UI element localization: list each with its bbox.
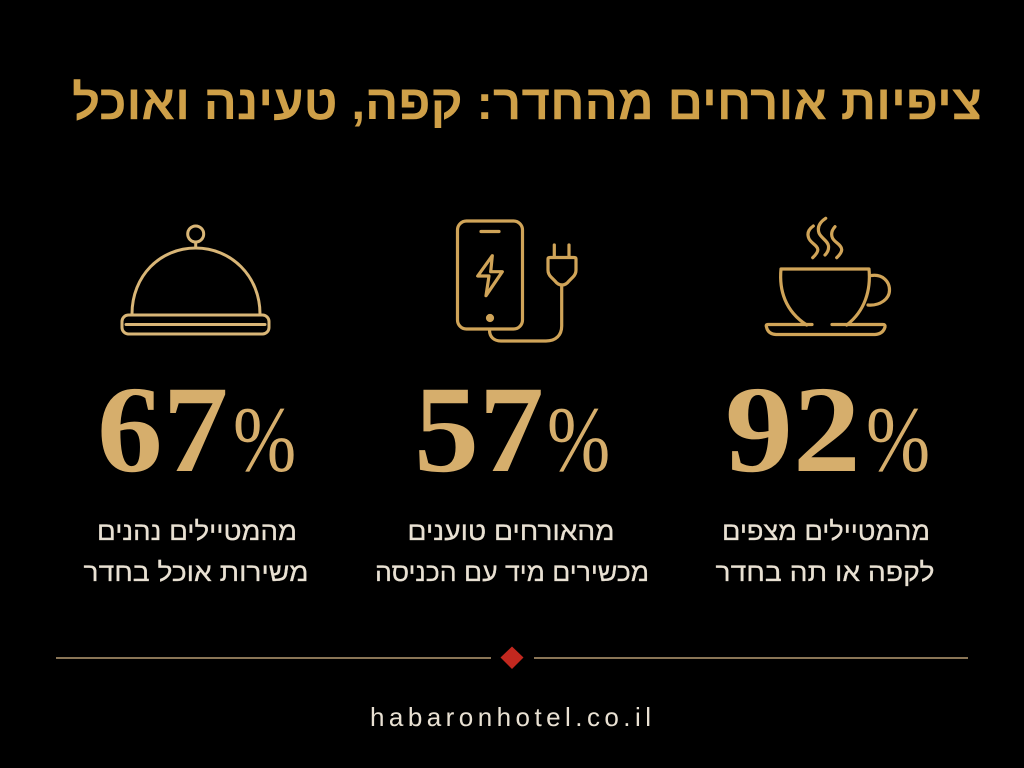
- caption: coffee or tea: [716, 516, 934, 587]
- stat: 57 percent: 57: [414, 362, 544, 498]
- panel: food service: [84, 226, 308, 587]
- caption: food service: מהמטיילים נהנים: [97, 516, 297, 546]
- stat: 92 percent: [725, 361, 930, 499]
- icon: red diamond: [500, 646, 524, 669]
- stat: 67 percent: 67: [97, 360, 228, 498]
- caption: food service: [84, 516, 308, 587]
- panel: coffee or tea: [716, 218, 934, 587]
- title: ציפיות אורחים מהחדר: קפה, טעינה ואוכל: [72, 76, 982, 130]
- stat: 57 percent: [414, 362, 610, 498]
- stat: 67 percent: [97, 360, 296, 498]
- footer website: habaronhotel.co.il: [370, 702, 651, 732]
- stat: 92 percent: 92: [725, 361, 861, 499]
- caption: device charging: מכשירים מיד עם הכניסה: [375, 557, 649, 587]
- stat: 57 percent: %: [547, 389, 610, 492]
- panel: device charging: [375, 221, 649, 587]
- stat: 92 percent: %: [866, 388, 930, 492]
- icon: coffee cup: [766, 218, 890, 334]
- caption: coffee or tea: לקפה או תה בחדר: [716, 557, 934, 587]
- caption: device charging: מהאורחים טוענים: [408, 516, 614, 546]
- icon: phone with charger: [458, 221, 576, 341]
- caption: food service: משירות אוכל בחדר: [84, 557, 308, 587]
- stat: 67 percent: %: [233, 389, 296, 492]
- caption: coffee or tea: מהמטיילים מצפים: [722, 516, 930, 546]
- icon: cloche: [122, 226, 269, 334]
- caption: device charging: [375, 516, 649, 587]
